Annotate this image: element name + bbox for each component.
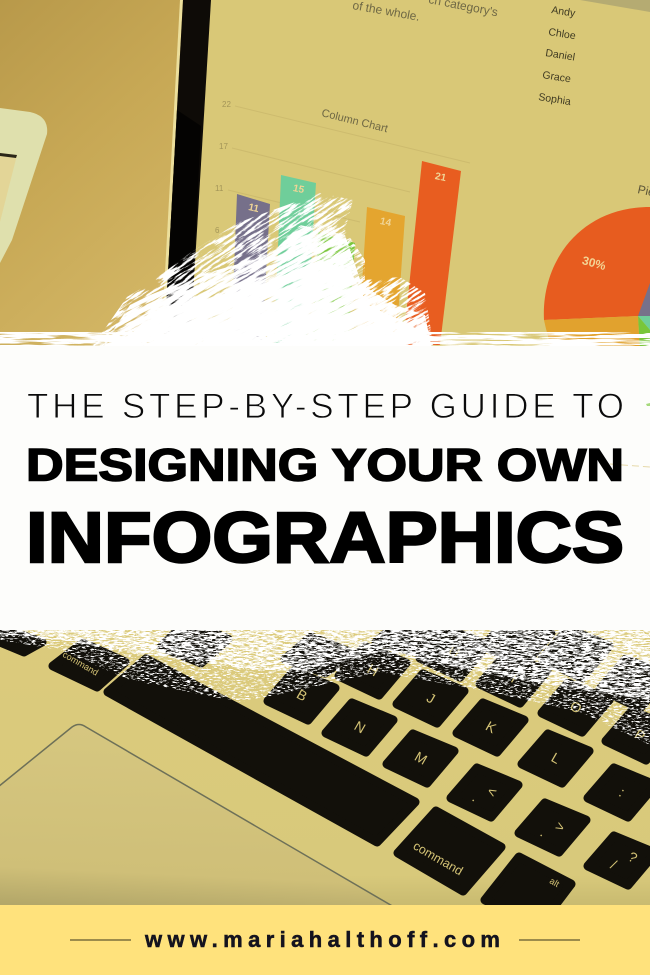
screen text: name list: Chloe [548,26,577,42]
title line 2: DESIGNING YOUR OWN [26,440,624,490]
y axis labels: 11 [215,184,224,193]
key: top left [0,628,42,652]
key: P [606,711,650,760]
key: space bar [108,659,415,842]
bar: green [312,232,355,345]
key: B [268,671,335,720]
pie slice: grey [638,283,650,316]
y axis labels: 6 [215,226,220,235]
key: N [326,703,393,752]
pie label: 30% [581,253,608,273]
brush: inner mound [133,260,428,346]
key: I: I [508,670,520,686]
photo: top right screen corner [580,0,650,12]
key: semicolon [588,768,650,817]
column chart [215,100,470,345]
bar: teal [274,175,316,345]
brush: sparse speckles over keyboard [0,630,650,745]
key: H: H [365,661,381,679]
key: O [542,683,609,732]
key: greater than [519,803,586,852]
key: G [285,637,352,673]
key: L: L [549,749,564,767]
bar: amber [358,207,405,345]
key: option: alt [548,876,562,889]
photo: laptop body [0,600,650,906]
key: right command [398,811,501,891]
y axis labels: 22 [222,100,231,109]
key: J [397,674,464,723]
screen text: name list: Andy [551,4,577,20]
bar values: 14 [379,216,393,229]
screen text: name list [538,4,577,108]
bar values: 21 [434,171,448,184]
key: I [480,654,547,703]
bar values: 15 [292,183,306,196]
key: upper row C [161,621,228,663]
key: U: U [446,643,462,661]
brush: dense mid mound [104,225,432,346]
photo: desk background [0,0,190,350]
key: M [387,734,454,783]
key: H [339,646,406,695]
pie slice: amber [544,316,640,350]
key: U [420,628,487,677]
footer rule left [70,939,131,941]
brush: top edge strip [0,332,650,352]
brush: sparse outer mound [93,193,434,346]
key: number row left [484,616,551,665]
key: left command [53,643,125,687]
screen text: name list: Daniel [545,47,576,64]
title line 1: THE STEP-BY-STEP GUIDE TO [27,387,624,426]
bar: purple [231,194,270,345]
bar: red [403,161,461,345]
key: M: M [412,748,430,768]
pie slice: teal [638,316,650,330]
key: L [522,734,589,783]
screen text: caption fragments [351,0,499,24]
footer bar [0,905,650,975]
key: F [376,620,443,652]
key: N: N [352,718,368,736]
key: option [485,857,571,925]
key: O: O [567,697,585,717]
photo: smartphone [0,108,47,263]
screen text: name list: Sophia [538,91,572,108]
key: number row right [600,659,650,708]
pie slice: red [544,207,650,320]
chart title: Column Chart [320,107,389,135]
key: K: K [483,718,500,737]
footer rule right [519,939,580,941]
key: question mark: / [608,857,619,872]
photo: monitor bezel [161,0,211,345]
screen text: name list: Grace [542,69,572,85]
key: less than: . [470,789,481,805]
photo: laptop screen [188,0,650,350]
key: less than: < [485,783,500,801]
brush: dense speckles over keyboard [0,630,650,700]
keyboard [0,616,650,925]
bar values [247,171,448,229]
footer url: www.mariahalthoff.com [144,927,500,952]
key: number row middle [542,629,609,678]
key: B: B [294,686,310,704]
key: question mark [588,836,650,885]
pie slice: green [638,316,650,350]
key: greater than: . [538,824,549,840]
y axis labels [215,100,231,235]
photo: trackpad [0,724,394,907]
key: J: J [424,689,438,707]
bar values: 11 [247,202,260,215]
title [26,387,624,578]
key: greater than: > [553,818,568,836]
key: semicolon: : [616,784,628,800]
key: P: P [632,726,648,744]
brush: band streak marks [610,403,650,467]
key: question mark: ? [626,848,640,866]
key: less than [451,768,518,817]
brush: main white band [0,346,650,630]
key: right command: command [411,839,465,878]
title line 3: INFOGRAPHICS [26,499,624,578]
key: K [457,703,524,752]
pie chart [544,182,650,350]
y axis labels: 17 [219,142,228,151]
key: left command: command [61,649,100,678]
